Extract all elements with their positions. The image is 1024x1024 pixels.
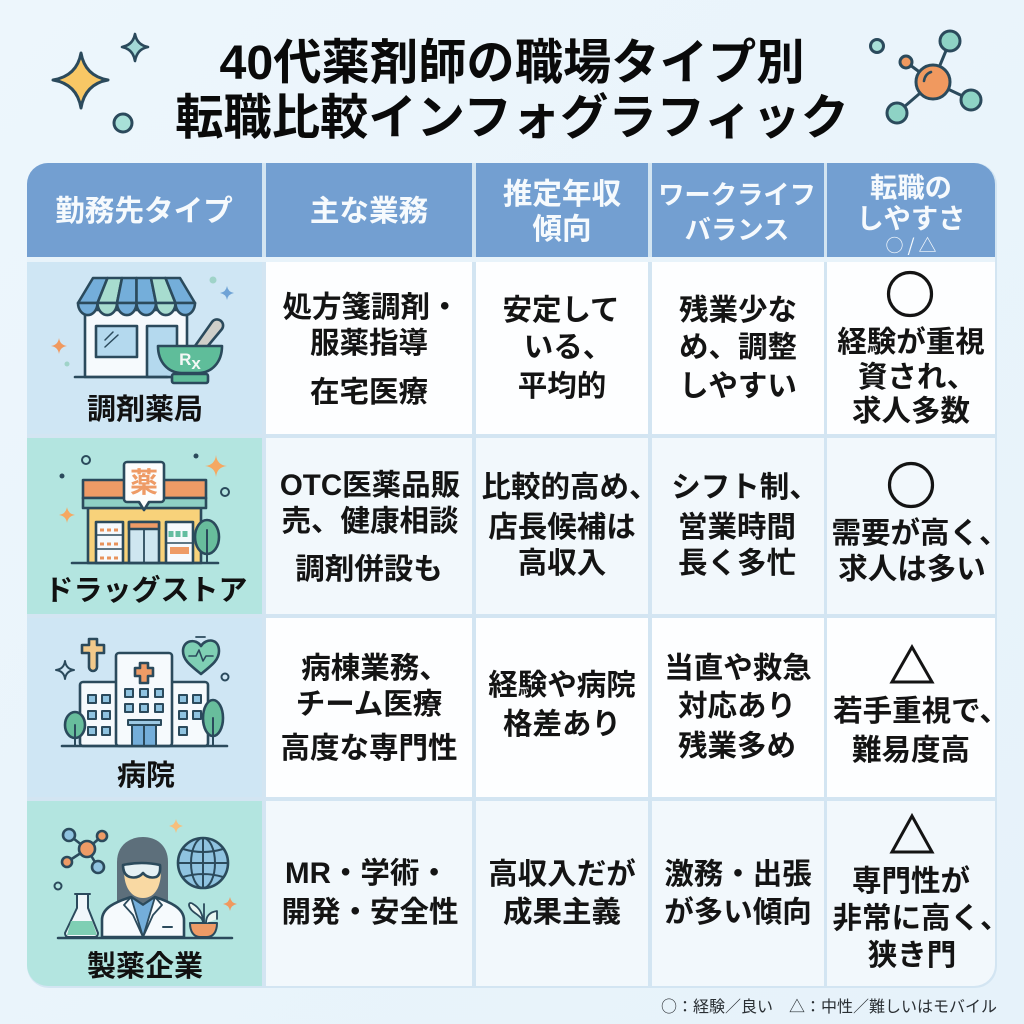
icon: molecule top right: [870, 31, 981, 123]
icon: plant and pot: [189, 903, 217, 937]
row: ドラッグストア: [44, 454, 1009, 607]
cell: main duties: [281, 857, 459, 929]
name: 病院: 病院: [117, 759, 175, 792]
icon: decorations: [59, 454, 229, 523]
cell: work-life balance: め、調整: [679, 331, 797, 364]
cell: main duties: チーム医療: [296, 688, 442, 721]
cell: income: 比較的高め、: [481, 471, 659, 504]
row 2 background: [27, 438, 997, 614]
cell: income: 高収入だが: [488, 857, 636, 891]
cell: work-life balance: シフト制、: [671, 471, 819, 504]
header labels: 勤務先タイプ: [55, 195, 233, 228]
cell: income: 成果主義: [503, 896, 621, 929]
cell: ease of job change: [837, 272, 985, 428]
row: 病院: [56, 637, 1009, 792]
cell: work-life balance: 残業多め: [678, 730, 796, 763]
cell: work-life balance: 残業少な: [679, 294, 797, 327]
icon: pharmacy with mortar: [75, 278, 223, 383]
row: 製薬企業: [54, 816, 1010, 983]
cell: work-life balance: しやすい: [679, 370, 797, 403]
cell: work-life balance: 営業時間: [678, 511, 796, 544]
cell: main duties: 在宅医療: [310, 376, 428, 409]
cell: main duties: OTC医薬品販: [280, 469, 460, 502]
cell: work-life balance: 対応あり: [678, 690, 796, 723]
header labels: 主な業務: [310, 195, 429, 228]
title: [175, 36, 849, 145]
row 3 background: [266, 618, 995, 797]
cell: income: [488, 857, 636, 929]
cell: ease of job change: 狭き門: [868, 939, 956, 972]
cell: main duties: 調剤併設も: [295, 553, 443, 586]
cell: income: [481, 471, 659, 580]
cell: ease of job change: 需要が高く、: [831, 516, 1009, 550]
row 1 background: [266, 262, 995, 434]
cell: ease of job change: [832, 816, 1010, 972]
cell: main duties: 処方箋調剤・: [282, 291, 460, 324]
title: 40代薬剤師の職場タイプ別: [220, 36, 804, 90]
cell: ease of job change: 資され、: [858, 361, 976, 394]
cell: work-life balance: 長く多忙: [678, 547, 796, 580]
header labels: 傾向: [532, 213, 592, 246]
cell: income: 格差あり: [503, 708, 621, 741]
cell: income: いる、: [524, 331, 612, 364]
cell: ease of job change: 若手重視で、: [833, 695, 1009, 728]
cell: main duties: 開発・安全性: [281, 896, 459, 929]
icon: hospital: [62, 653, 227, 746]
cell: ease of job change: 経験が重視: [837, 325, 985, 359]
cell: main duties: [282, 291, 460, 409]
icon: globe: [178, 838, 228, 888]
cell: main duties: 高度な専門性: [280, 732, 458, 765]
header labels: バランス: [685, 215, 789, 245]
icon: drugstore: [72, 462, 219, 563]
footnote legend: ○：経験／良い △：中性／難しいはモバイル: [661, 993, 997, 1017]
icon: sparkles top left: [53, 34, 148, 132]
icon: flask: [65, 894, 98, 937]
icon: pharmacy with mortar: R: [179, 350, 191, 369]
cell: work-life balance: [671, 471, 819, 580]
cell: income: 経験や病院: [488, 669, 636, 702]
cell: income: [488, 669, 636, 741]
title: 転職比較インフォグラフィック: [175, 91, 849, 145]
table header row: [27, 163, 997, 262]
cell: main duties: 病棟業務、: [301, 652, 449, 685]
cell: work-life balance: [664, 652, 812, 763]
cell: ease of job change: 求人多数: [852, 395, 970, 428]
header labels: 転職の: [870, 172, 952, 203]
cell: main duties: [280, 652, 458, 765]
cell: income: 安定して: [502, 294, 620, 327]
icon: scientist: [102, 837, 184, 937]
sign character: 薬: [130, 467, 158, 498]
cell: income: [502, 294, 620, 403]
icon: medical symbols: [56, 637, 228, 680]
cell: work-life balance: が多い傾向: [664, 895, 812, 929]
cell: main duties: 服薬指導: [310, 327, 428, 360]
header labels: しやすさ: [857, 203, 965, 234]
name: ドラッグストア: ドラッグストア: [44, 574, 248, 607]
header labels: 推定年収: [503, 178, 622, 211]
cell: ease of job change: [833, 647, 1009, 767]
icon: molecule: [54, 829, 107, 890]
cell: income: 平均的: [518, 370, 606, 403]
comparison table: [27, 163, 1010, 988]
row: 調剤薬局: [51, 272, 985, 428]
cell: income: 高収入: [518, 547, 606, 580]
cell: work-life balance: [679, 294, 797, 403]
header labels: ○ / △: [885, 232, 937, 258]
header labels: [55, 172, 965, 258]
cell: ease of job change: 専門性が: [852, 864, 970, 898]
cell: work-life balance: 当直や救急: [664, 652, 812, 685]
cell: ease of job change: 非常に高く、: [832, 902, 1010, 935]
icon: sparkles: [51, 276, 234, 366]
row 4 background: [27, 801, 997, 988]
header labels: ワークライフ: [658, 180, 816, 210]
cell: main duties: [280, 469, 460, 586]
name: 製薬企業: 製薬企業: [87, 950, 203, 983]
cell: main duties: 売、健康相談: [281, 505, 459, 538]
icon: pharmacy with mortar: x: [191, 354, 201, 373]
cell: main duties: MR・学術・: [285, 857, 449, 890]
name: 調剤薬局: 調剤薬局: [87, 393, 203, 426]
cell: income: 店長候補は: [488, 511, 636, 544]
cell: ease of job change: 難易度高: [852, 734, 970, 767]
cell: work-life balance: [664, 858, 812, 929]
cell: work-life balance: 激務・出張: [664, 858, 812, 891]
cell: ease of job change: [831, 464, 1009, 586]
ground and sparkles: [58, 819, 237, 938]
cell: ease of job change: 求人は多い: [838, 553, 986, 586]
